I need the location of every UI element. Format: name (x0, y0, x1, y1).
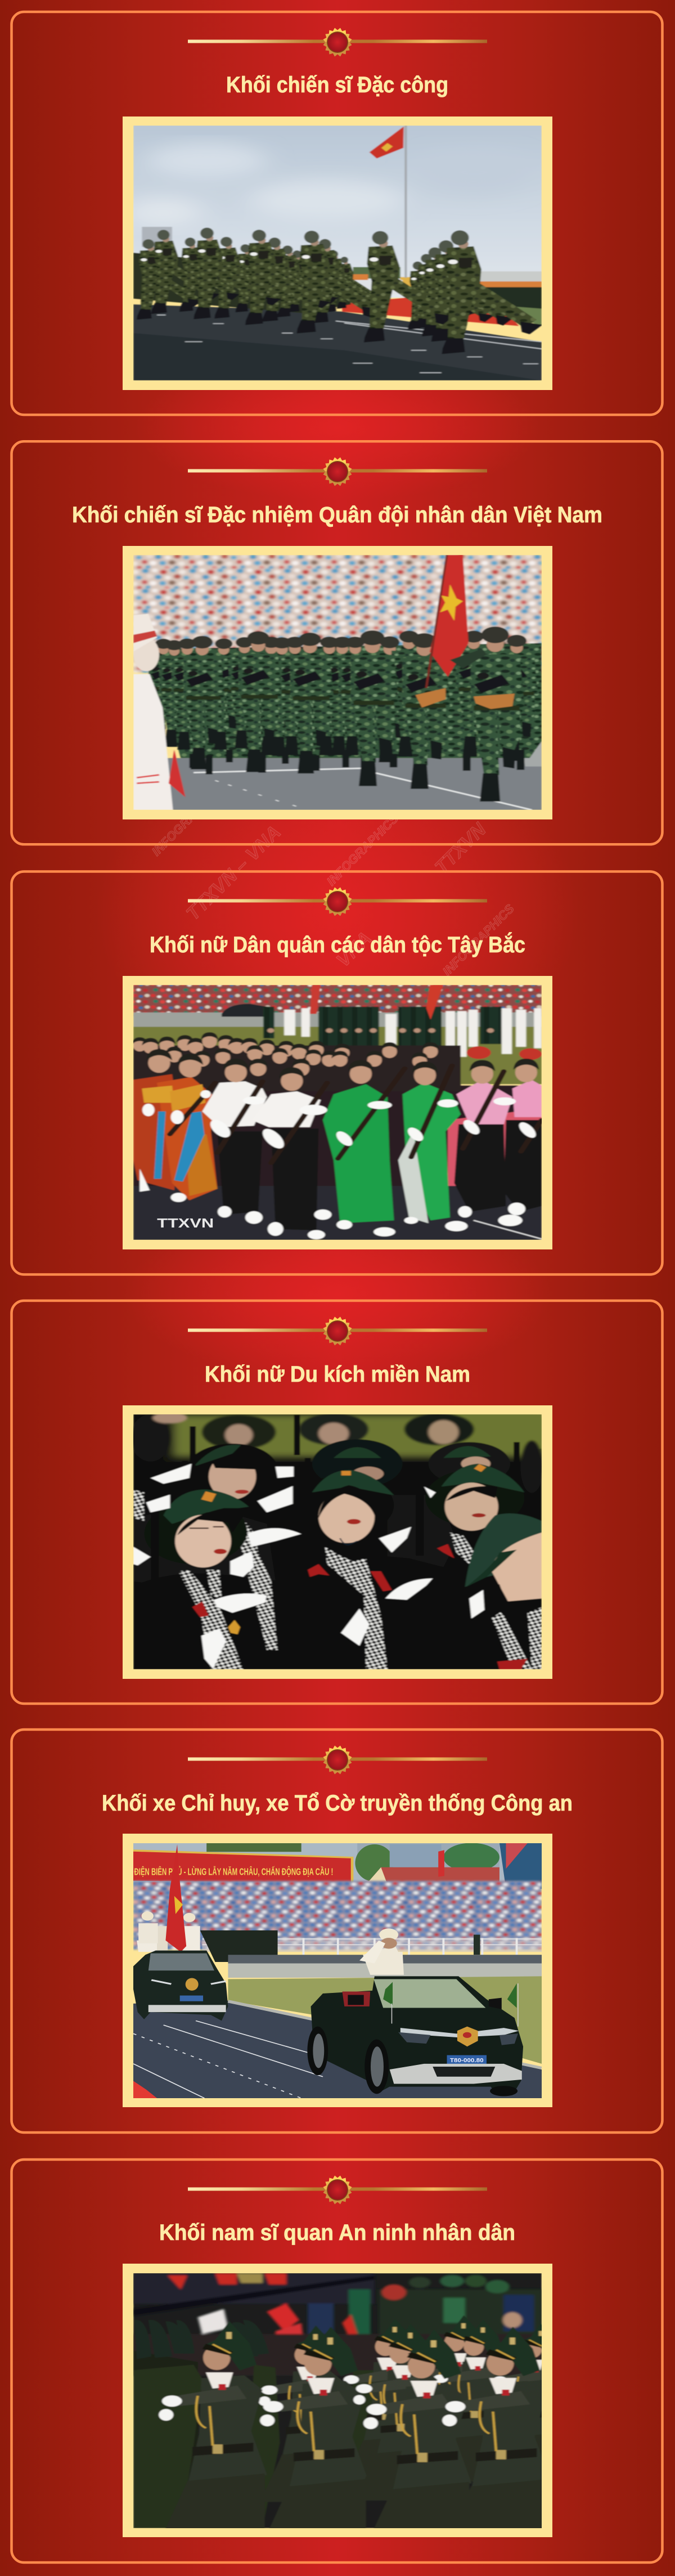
photo: special forces marching with flag (133, 555, 542, 810)
agency mark: TTXVN (157, 1216, 214, 1231)
watermarks: TTXVN – VNA (182, 821, 285, 925)
watermarks: INFOGRAPHICS (149, 781, 226, 859)
heading: Khối xe Chỉ huy, xe Tổ Cờ truyền thống Công an (102, 1791, 573, 1816)
heading: Khối chiến sĩ Đặc công (226, 73, 448, 97)
watermarks: VNA (332, 928, 376, 971)
gold divider with medallion (188, 28, 487, 57)
panel 3: Khối nữ Dân quân các dân tộc Tây Bắc (11, 871, 663, 1274)
panel 2: Khối chiến sĩ Đặc nhiệm Quân đội nhân dân Việt Nam (11, 441, 663, 844)
heading: Khối chiến sĩ Đặc nhiệm Quân đội nhân dân Việt Nam (72, 503, 602, 527)
panel border (11, 1730, 663, 2133)
checkered scarves (133, 1490, 542, 1669)
panel border (11, 12, 663, 415)
watermarks (149, 781, 517, 979)
watermarks: INFOGRAPHICS (324, 811, 401, 889)
heading: Khối nữ Dân quân các dân tộc Tây Bắc (150, 931, 525, 957)
gold divider with medallion (188, 887, 487, 916)
photo: southern guerrilla women in green hats (133, 1414, 542, 1669)
photo: male public security officers marching (133, 2273, 542, 2528)
photo frame (123, 117, 552, 390)
heading: Khối nam sĩ quan An ninh nhân dân (159, 2220, 515, 2245)
panel 5: Khối xe Chỉ huy, xe Tổ Cờ truyền thống Công an (11, 1730, 663, 2133)
gold divider with medallion (188, 1316, 487, 1346)
watermarks: INFOGRAPHICS (440, 901, 517, 979)
photo: open-top command cars and crowd (133, 1843, 542, 2098)
panel border (11, 441, 663, 844)
photo frame (123, 2264, 552, 2537)
panel border (11, 1301, 663, 1704)
panel border (11, 2160, 663, 2562)
rear car with flag party (133, 1844, 228, 2021)
photo frame (123, 976, 552, 1249)
front open-top car with saluting officer: T80-000.80 (450, 2057, 484, 2063)
photo frame (123, 1405, 552, 1679)
gold divider with medallion (188, 1745, 487, 1775)
panel 4: Khối nữ Du kích miền Nam (11, 1301, 663, 1704)
panel 1: Khối chiến sĩ Đặc công (11, 12, 663, 415)
panel 6: Khối nam sĩ quan An ninh nhân dân (11, 2160, 663, 2562)
front open-top car with saluting officer (307, 1928, 523, 2096)
photo: ethnic women militia in coloured dress (133, 985, 542, 1240)
gold divider with medallion (188, 457, 487, 486)
gold divider with medallion (188, 2175, 487, 2205)
heading: Khối nữ Du kích miền Nam (205, 1362, 470, 1387)
photo frame (123, 1834, 552, 2107)
photo frame (123, 546, 552, 819)
watermarks: TTXVN (431, 818, 490, 879)
panel border (11, 871, 663, 1274)
photo: marching commandos under flagpole (133, 126, 542, 380)
